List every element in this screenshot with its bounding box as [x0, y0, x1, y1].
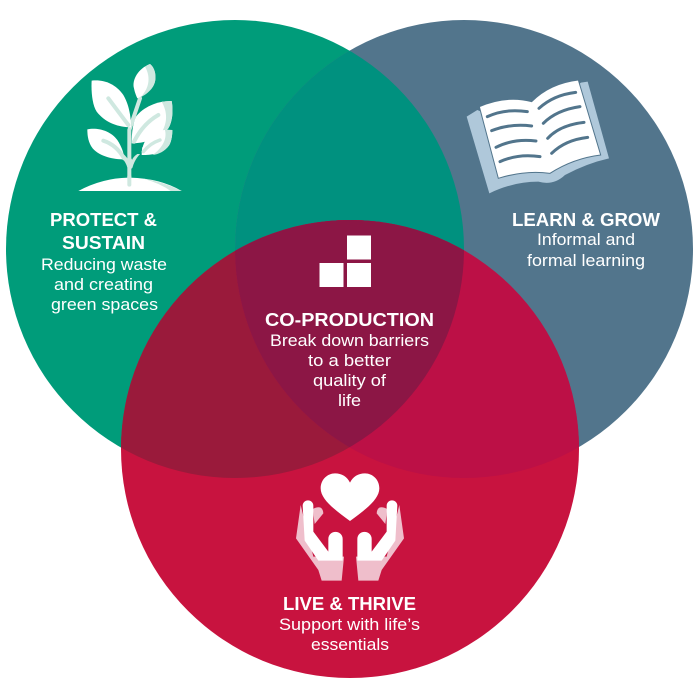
- overlap: blue and red: [235, 220, 579, 478]
- overlap: green and red: [121, 220, 464, 478]
- circle: learn and grow: [235, 20, 693, 478]
- right fingers, white: [357, 500, 397, 561]
- icon: plant: [78, 64, 182, 191]
- text: learn and grow: formal learning: [527, 251, 645, 270]
- top leaf: [134, 64, 155, 98]
- circle: protect and sustain: [6, 20, 464, 478]
- text: learn and grow: [512, 209, 661, 270]
- right hand: [356, 500, 404, 581]
- text: protect and sustain: PROTECT &: [50, 209, 157, 230]
- stems: [123, 98, 143, 183]
- left small leaf: [87, 129, 124, 159]
- text: live and thrive: essentials: [311, 635, 389, 654]
- text lines: [487, 92, 588, 162]
- text: protect and sustain: green spaces: [51, 295, 158, 314]
- text: live and thrive: LIVE & THRIVE: [283, 593, 416, 614]
- left hand: [296, 500, 344, 581]
- right large leaf: [132, 101, 173, 143]
- text: protect and sustain: Reducing waste: [41, 255, 167, 274]
- text: protect and sustain: [41, 209, 167, 314]
- book pages: [479, 80, 601, 178]
- right thumb, pale: [377, 507, 387, 524]
- overlap: centre: [235, 220, 464, 447]
- left thumb, pale: [313, 507, 323, 524]
- text: live and thrive: Support with life’s: [279, 615, 420, 634]
- left large leaf: [92, 80, 131, 127]
- gap behind small leaf: [132, 144, 142, 160]
- text: co-production: CO-PRODUCTION: [265, 309, 434, 330]
- text: protect and sustain: SUSTAIN: [62, 232, 145, 253]
- circle: live and thrive: [121, 220, 579, 678]
- heart: [321, 473, 379, 521]
- overlap: green and blue: [235, 50, 464, 251]
- icon: heart in hands: [296, 473, 404, 581]
- text: live and thrive: [279, 593, 420, 654]
- left palm, pale: [296, 505, 344, 581]
- text: protect and sustain: and creating: [54, 275, 153, 294]
- text: co-production: quality of: [313, 371, 386, 390]
- text: co-production: life: [338, 391, 361, 410]
- left fingers, white: [303, 500, 343, 561]
- text: learn and grow: LEARN & GROW: [512, 209, 661, 230]
- text: learn and grow: Informal and: [537, 230, 635, 249]
- right small leaf: [142, 130, 172, 155]
- text: co-production: Break down barriers: [270, 331, 429, 350]
- icon: open book: [467, 80, 609, 193]
- right palm, pale: [356, 505, 404, 581]
- book cover: [467, 82, 609, 193]
- soil: [78, 178, 182, 191]
- icon: co-production squares: [320, 236, 371, 287]
- text: co-production: to a better: [308, 351, 391, 370]
- text: co-production: [265, 309, 434, 410]
